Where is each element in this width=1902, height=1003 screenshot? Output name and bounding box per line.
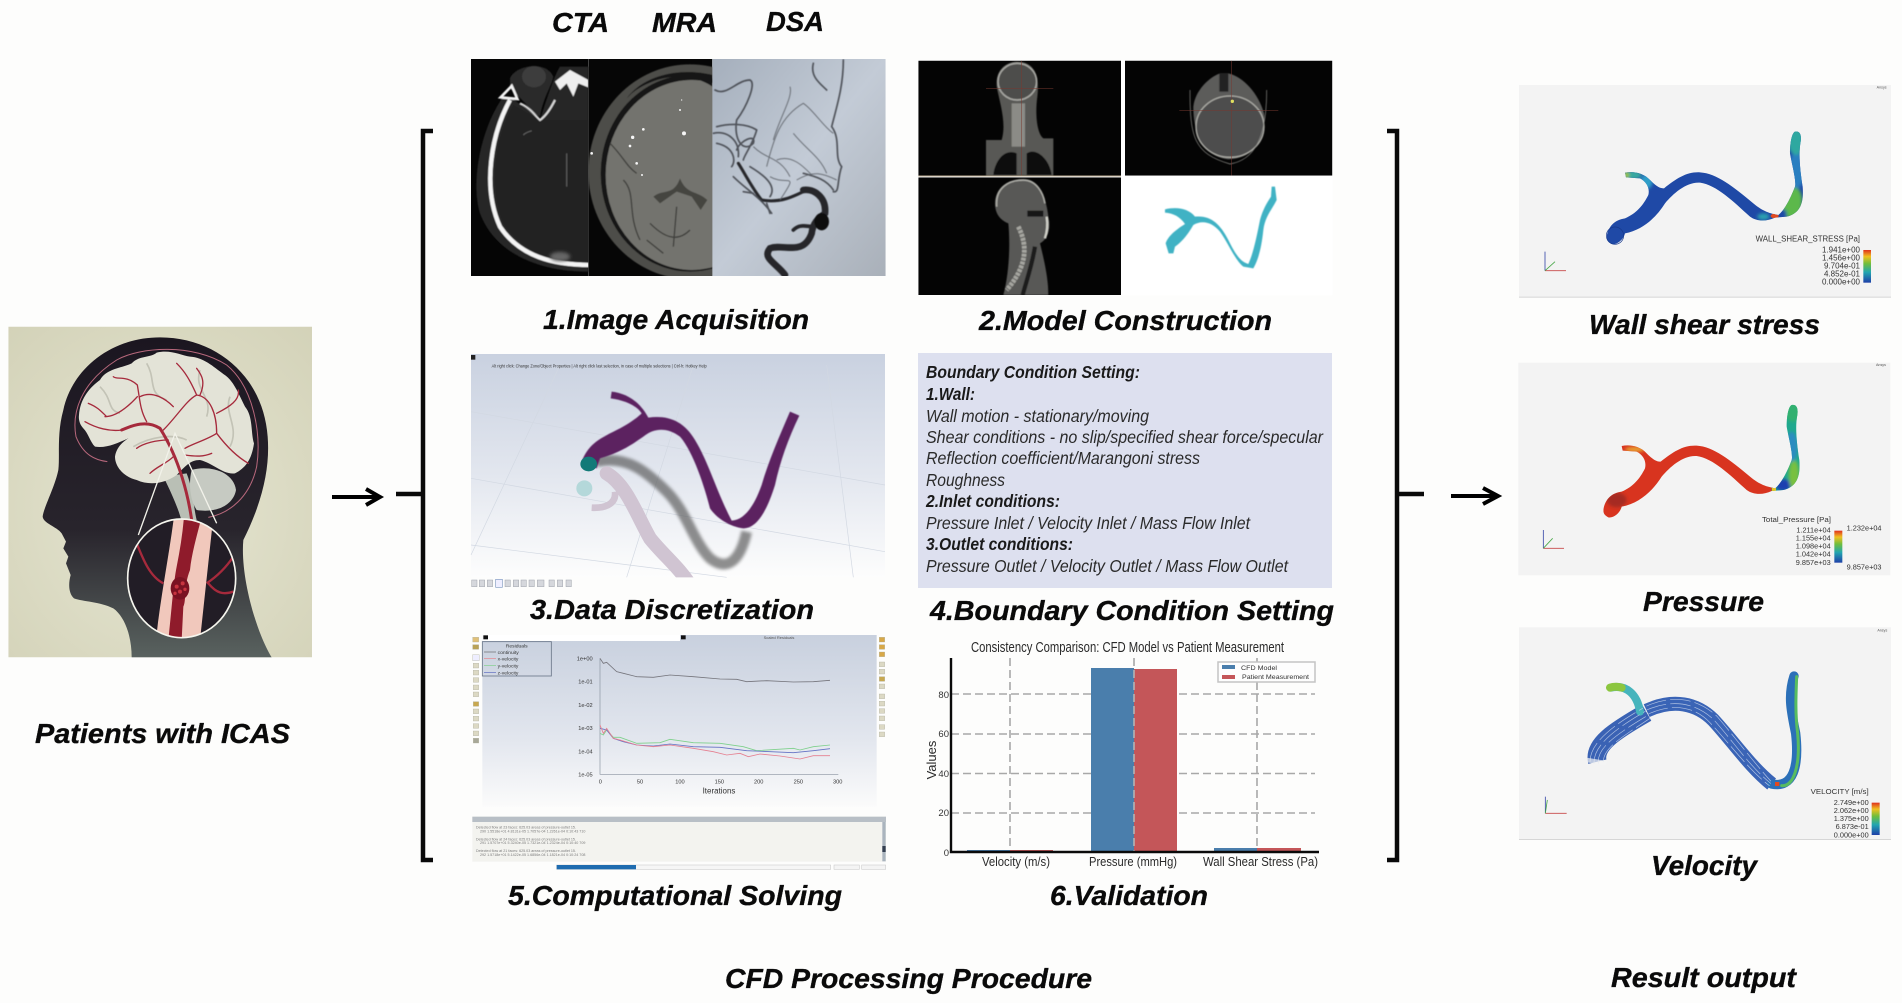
panel: boundary condition text (918, 353, 1332, 588)
divider lines (918, 174, 1121, 177)
panel: data discretization viewport (471, 354, 885, 587)
panel: patient head illustration (8, 327, 312, 657)
meningeal outline (75, 349, 258, 517)
magnified artery (128, 517, 236, 640)
brain arteries (85, 363, 248, 520)
DSA angiogram (712, 59, 886, 276)
velocity legend: 1.375e+00 (1834, 814, 1869, 823)
residual chart: 0 (599, 779, 602, 785)
y tick labels: 40 (938, 769, 949, 780)
pressure legend: 1.211e+04 (1796, 525, 1831, 534)
wall heading: 1.Wall: (926, 384, 975, 404)
residuals legend: continuity (498, 650, 519, 656)
head silhouette (43, 337, 272, 657)
coronal CT view (918, 61, 1121, 176)
pressure legend: Total_Pressure [Pa] (1762, 515, 1831, 524)
wall motion: Wall motion - stationary/moving (926, 406, 1149, 426)
residual chart: 1e-02 (578, 703, 593, 709)
left toolbar (473, 637, 479, 743)
label: CTA: CTA (552, 7, 609, 38)
outlet heading: 3.Outlet conditions: (926, 534, 1073, 554)
progress bar (557, 865, 886, 869)
right toolbar (879, 637, 885, 737)
WSS legend: 1.941e+00 (1822, 246, 1861, 255)
console output: 292 1.5718e+01 5.1422e-05 1.6856e-04 1.1821e-04 0:10:24 708 (480, 853, 585, 857)
axes (951, 658, 1319, 852)
panel: computational solving residuals (472, 635, 886, 869)
chart title: Consistency Comparison: CFD Model vs Patient Measurement (971, 640, 1284, 656)
residual chart: 1e-03 (578, 726, 593, 732)
bars: CFD model (967, 668, 1257, 852)
console output: Detected flow at 21 faces: 625.03 areas of pressure-outlet 15. (476, 849, 576, 853)
pressure legend: 1.042e+04 (1796, 550, 1831, 559)
console output: Detected flow at 24 faces: 625.03 areas of pressure-outlet 15. (476, 837, 576, 841)
MRA scan (588, 59, 712, 276)
residual chart: 1e-05 (578, 772, 593, 778)
velocity legend: 2.062e+00 (1834, 806, 1869, 815)
x labels: Wall Shear Stress (Pa) (1203, 855, 1318, 869)
CTA scan (471, 59, 590, 276)
pressure legend (1762, 515, 1882, 572)
vessel colored by pressure (1603, 404, 1800, 518)
pressure legend: 1.098e+04 (1796, 542, 1831, 551)
label: wall shear stress: Wall shear stress (1589, 309, 1820, 340)
bottom toolbar (472, 579, 571, 587)
panel: image acquisition scans (471, 59, 886, 279)
residual chart: 100 (675, 779, 685, 785)
brainstem (163, 473, 197, 522)
residual chart: 250 (794, 779, 803, 785)
y tick labels: 0 (944, 848, 949, 859)
brain sulci (100, 363, 233, 447)
grid lines (951, 658, 1315, 852)
vessel shadow (597, 460, 747, 564)
inlet heading: 2.Inlet conditions: (925, 491, 1060, 511)
label: 3.Data Discretization: 3.Data Discretization (530, 594, 814, 625)
console output (472, 817, 886, 862)
WSS legend: 1.456e+00 (1822, 254, 1861, 263)
label: DSA: DSA (766, 6, 824, 37)
inlet options: Pressure Inlet / Velocity Inlet / Mass Flow Inlet (926, 513, 1251, 533)
y tick labels: 60 (938, 729, 949, 740)
velocity legend (1811, 787, 1880, 839)
axis triad (1545, 797, 1567, 813)
residuals legend: z-velocity (498, 670, 519, 676)
WSS legend: 0.000e+00 (1822, 278, 1861, 287)
label: 4.Boundary Condition Setting: 4.Boundary Condition Setting (929, 595, 1334, 626)
label: result output: Result output (1611, 962, 1798, 993)
WSS legend: 4.852e-01 (1824, 269, 1861, 278)
label: 1.Image Acquisition: 1.Image Acquisition (543, 304, 809, 335)
pressure legend: 1.232e+04 (1847, 524, 1882, 533)
chart legend (1218, 662, 1315, 682)
label: 6.Validation: 6.Validation (1050, 880, 1208, 911)
velocity legend: 0.000e+00 (1834, 830, 1869, 839)
velocity legend: 6.873e-01 (1836, 822, 1869, 831)
vessel colored by WSS (1606, 132, 1803, 244)
scaled residuals title: Scaled Residuals (764, 635, 794, 640)
console output: 291 1.5707e+01 5.3240e-05 1.7321e-04 1.2324e-04 0:10:40 709 (480, 841, 585, 845)
residuals legend (482, 642, 551, 676)
residuals legend: x-velocity (498, 657, 519, 663)
label: pressure: Pressure (1643, 586, 1764, 617)
panel: pressure result (1518, 363, 1890, 575)
panel: velocity result: Ansys (1877, 628, 1887, 632)
y tick labels: 20 (938, 808, 949, 819)
inlet ring (1606, 227, 1624, 244)
brain (79, 352, 254, 483)
residuals legend: Residuals (506, 643, 528, 649)
label: patients with ICAS: Patients with ICAS (35, 718, 290, 749)
panel: wall shear stress result (1519, 85, 1891, 298)
left bracket (396, 131, 433, 860)
heading line: Boundary Condition Setting: (926, 362, 1140, 382)
residual chart: 1e+00 (577, 656, 593, 662)
panel: pressure result: Ansys (1876, 363, 1886, 367)
pressure legend: 9.857e+03 (1796, 558, 1831, 567)
chart legend: CFD Model (1241, 665, 1278, 672)
viewport help text: Alt right click: Change Zone/Object Properties | Alt right click last selection, in case of multiple selections | Ctrl-h: Hotkey Help (492, 363, 707, 368)
panel: model construction views (918, 60, 1333, 295)
axial CT view (1125, 61, 1332, 176)
residual chart: 1e-01 (578, 680, 593, 686)
y tick labels (938, 690, 949, 859)
window title bars (482, 635, 680, 641)
panel: wall shear stress result: Ansys (1877, 86, 1887, 90)
residual chart (577, 656, 842, 796)
label: velocity: Velocity (1651, 850, 1758, 881)
outlet options: Pressure Outlet / Velocity Outlet / Mass Flow Outlet (926, 556, 1289, 576)
velocity legend: 2.749e+00 (1834, 798, 1869, 807)
vessel reflection (576, 473, 690, 585)
velocity streamlines (1587, 676, 1798, 786)
console output: Detected flow at 23 faces: 625.03 areas of pressure-outlet 15. (476, 825, 576, 829)
label: MRA: MRA (652, 7, 717, 38)
residuals legend: y-velocity (498, 664, 519, 670)
bars: patient measurement (1010, 669, 1301, 852)
label: 5.Computational Solving: 5.Computational Solving (508, 880, 842, 911)
WSS legend: WALL_SHEAR_STRESS [Pa] (1756, 234, 1860, 243)
arrow: procedure to results (1451, 488, 1498, 504)
right bracket (1387, 131, 1424, 860)
vessel 3D model (1165, 187, 1277, 268)
shear conditions: Shear conditions - no slip/specified shear force/specular (926, 427, 1324, 447)
residual chart: 300 (833, 779, 842, 785)
sagittal CT view (918, 177, 1121, 295)
residual chart: 50 (637, 779, 643, 785)
y tick labels: 80 (938, 690, 949, 701)
pressure legend: 9.857e+03 (1847, 563, 1882, 572)
residual chart: 150 (715, 779, 724, 785)
console output: 290 1.5518e+01 4.8131e-05 1.7057e-04 1.2261e-04 0:10:43 710 (480, 829, 585, 833)
label: CFD Processing Procedure: CFD Processing Procedure (725, 963, 1092, 994)
panel: validation bar chart (924, 640, 1319, 869)
residual chart: 200 (754, 779, 763, 785)
x labels: Pressure (mmHg) (1089, 855, 1177, 869)
roughness: Roughness (926, 470, 1005, 490)
residual chart: 1e-04 (578, 749, 593, 755)
axis triad (1543, 530, 1564, 548)
residual chart: Iterations (703, 787, 735, 796)
pressure legend: 1.155e+04 (1796, 533, 1831, 542)
teal inlet (580, 457, 597, 471)
panel: velocity result (1519, 627, 1891, 840)
x labels (982, 855, 1318, 869)
purple vessel (582, 392, 799, 528)
label: 2.Model Construction: 2.Model Construction (978, 305, 1272, 336)
zoom pointer lines (138, 433, 217, 535)
WSS legend: 9.704e-01 (1824, 261, 1861, 270)
WSS legend (1756, 234, 1871, 287)
y axis label: Values (924, 740, 939, 779)
floor grid (471, 365, 885, 577)
reflection coefficient: Reflection coefficient/Marangoni stress (926, 448, 1200, 468)
x labels: Velocity (m/s) (982, 855, 1050, 869)
velocity legend: VELOCITY [m/s] (1811, 787, 1869, 796)
axis triad (1545, 252, 1566, 271)
chart legend: Patient Measurement (1242, 674, 1309, 681)
cerebellum (190, 468, 236, 511)
window marker (471, 355, 475, 360)
arrow: patients to procedure (332, 489, 380, 505)
